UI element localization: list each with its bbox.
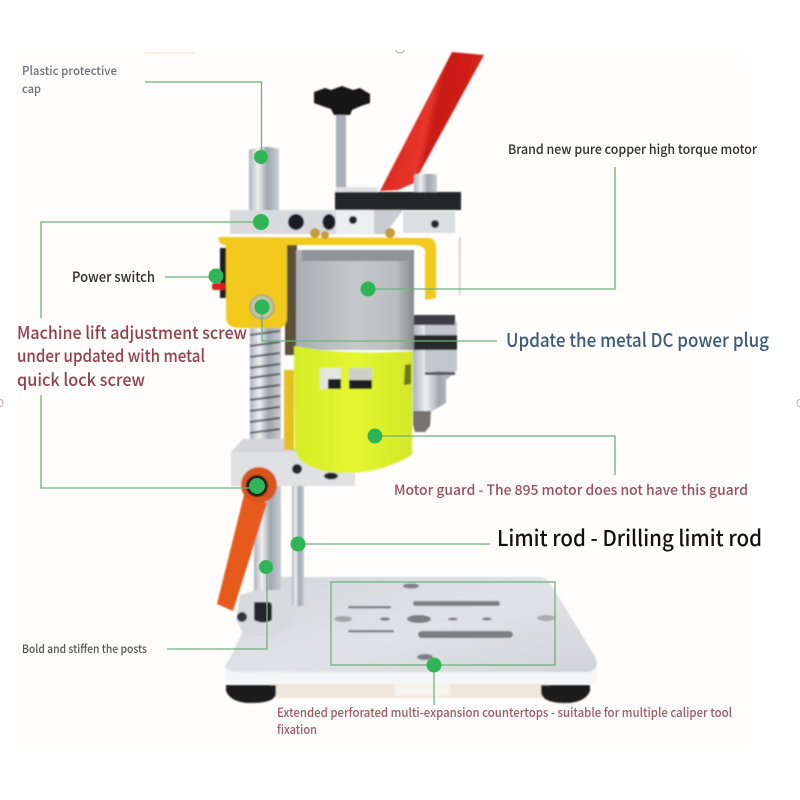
label: DC power plug: Update the metal DC power plug xyxy=(506,326,769,353)
upper aluminium block xyxy=(230,210,460,295)
upper column with top cap xyxy=(249,147,279,210)
threaded lead screw xyxy=(250,326,281,446)
label: lift adjustment screw: under updated with metal xyxy=(17,343,205,368)
red lever handle xyxy=(380,52,484,191)
label: power switch: Power switch xyxy=(72,267,155,287)
callout lines xyxy=(41,82,615,705)
label: stiffened posts: Bold and stiffen the posts xyxy=(22,641,147,657)
lower column and clamp block xyxy=(236,486,296,637)
black top bar xyxy=(335,187,461,210)
label: limit rod: Limit rod - Drilling limit rod xyxy=(497,521,762,553)
label: lift adjustment screw: Machine lift adjustment screw xyxy=(17,320,247,345)
steel stud xyxy=(414,174,437,194)
yellow-green motor guard xyxy=(294,346,413,473)
label: perforated countertops: fixation xyxy=(277,719,317,738)
red power switch xyxy=(212,248,226,298)
drill chuck xyxy=(413,315,457,432)
base plate xyxy=(225,577,597,703)
label: lift adjustment screw: quick lock screw xyxy=(17,367,145,392)
label: copper motor: Brand new pure copper high torque motor xyxy=(508,139,758,158)
slider block xyxy=(231,439,355,486)
bracket bolt xyxy=(250,295,274,319)
label: lift adjustment screw xyxy=(17,320,247,392)
drill press product illustration xyxy=(212,52,597,703)
dark gap behind bracket xyxy=(285,245,297,355)
label: plastic protective cap: Plastic protective xyxy=(22,62,117,79)
label: plastic protective cap: cap xyxy=(22,80,41,97)
callout dots xyxy=(208,150,442,672)
label: motor guard: Motor guard - The 895 motor does not have this guard xyxy=(394,480,748,500)
orange lock lever xyxy=(217,467,277,611)
yellow motor bracket xyxy=(218,228,436,328)
label: perforated countertops: Extended perforated multi-expansion countertops - suitable for multiple caliper tool xyxy=(277,702,732,721)
motor body xyxy=(296,250,414,350)
label: plastic protective cap xyxy=(22,62,117,97)
label: perforated countertops xyxy=(277,702,732,738)
top knob with threaded rod xyxy=(314,86,370,191)
limit rod xyxy=(292,486,304,606)
side yellow strip behind guard xyxy=(284,370,294,450)
